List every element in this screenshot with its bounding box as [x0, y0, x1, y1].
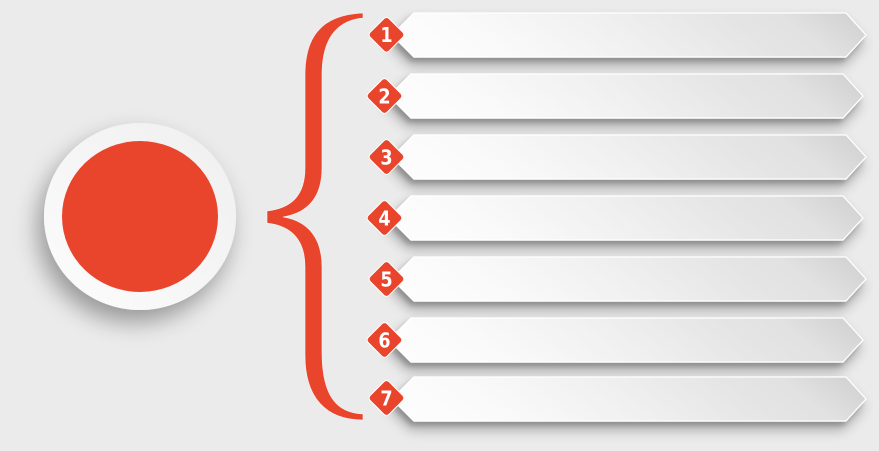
item 5 badge [368, 260, 405, 298]
item 5 [368, 257, 866, 301]
item 6 bar [389, 318, 863, 362]
central circle [44, 123, 236, 310]
item 6 badge [366, 321, 403, 359]
item 2 badge [366, 77, 403, 115]
item 7 [368, 377, 866, 421]
item 3 [368, 135, 866, 179]
item 3 badge: 3 [380, 147, 393, 170]
item 3 bar [392, 135, 866, 179]
item 7 badge [368, 379, 405, 417]
item 2 badge: 2 [378, 86, 391, 109]
item 1 [368, 13, 866, 57]
item 1 badge: 1 [380, 25, 393, 47]
curly bracket [267, 13, 363, 420]
item 2 bar [389, 74, 863, 118]
item 7 bar [392, 377, 866, 421]
item 4 [366, 196, 863, 240]
item 4 badge: 4 [378, 208, 391, 231]
item 6 badge: 6 [378, 330, 391, 353]
item 5 badge: 5 [380, 269, 393, 292]
item 4 badge [366, 199, 403, 237]
item 2 [366, 74, 863, 118]
item 4 bar [389, 196, 863, 240]
item 1 bar [392, 13, 866, 57]
item 3 badge [368, 138, 405, 176]
item 1 badge [368, 16, 405, 54]
item 7 badge: 7 [380, 388, 393, 411]
item 6 [366, 318, 863, 362]
item 5 bar [392, 257, 866, 301]
